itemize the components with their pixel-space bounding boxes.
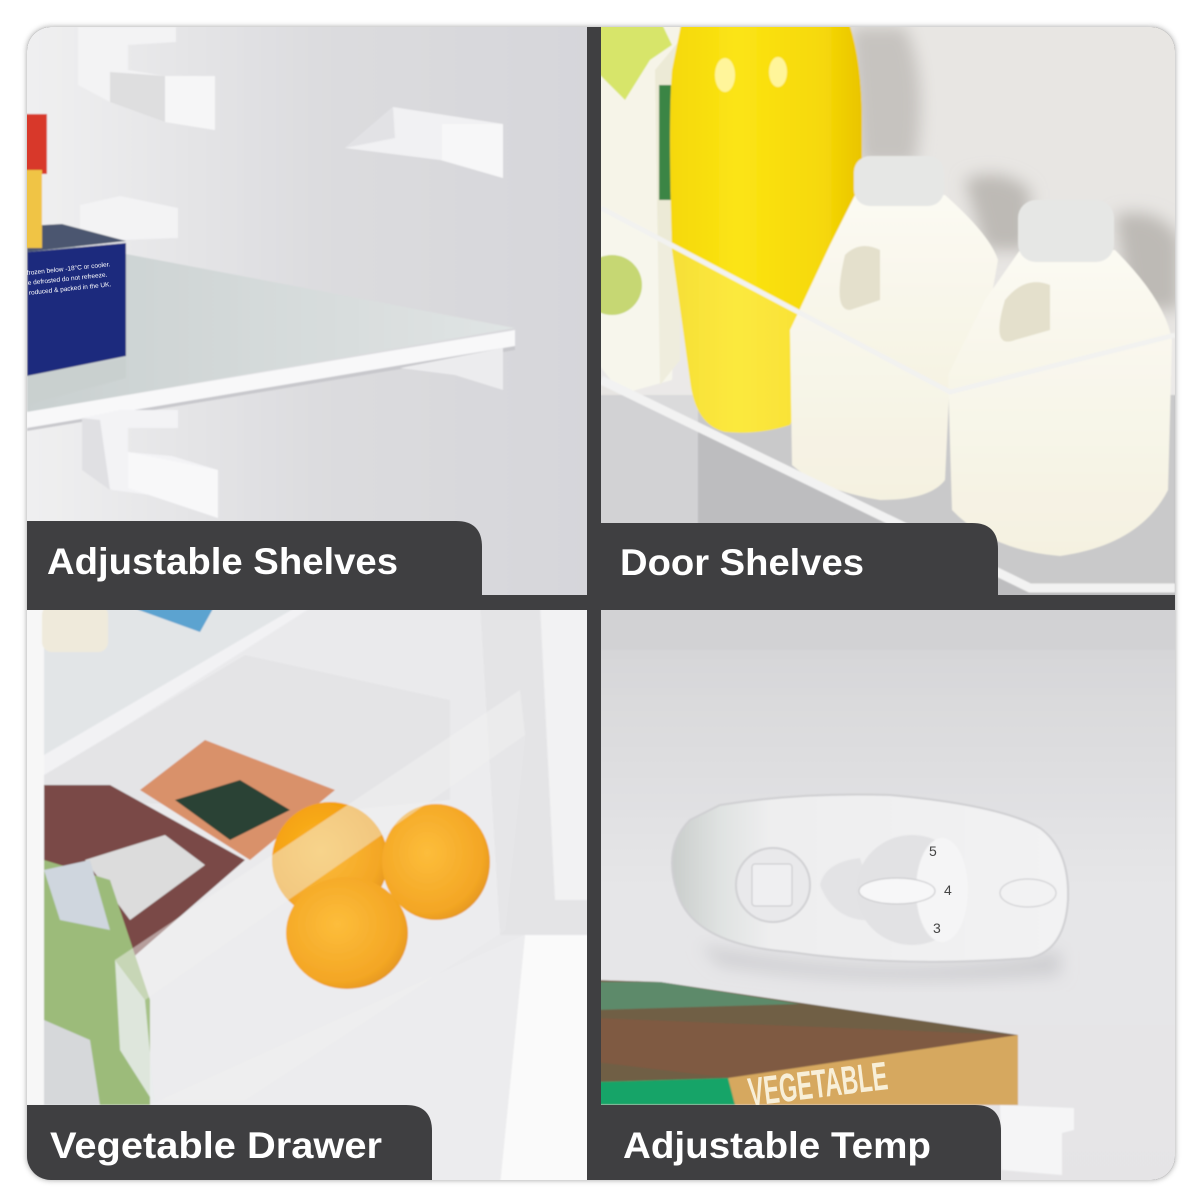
food box — [595, 980, 1018, 1105]
icon: upper left shelf supports — [102, 27, 215, 130]
milk bottle 2 — [948, 200, 1172, 556]
label: adjustable temp — [601, 1105, 1001, 1180]
box small print: roduced & packed in the UK. — [29, 281, 112, 297]
drawer back — [44, 748, 341, 805]
label: vegetable drawer — [27, 1105, 432, 1180]
milk bottle 1 — [790, 156, 998, 500]
box small print — [27, 262, 111, 295]
dial numbers: 5 — [929, 843, 937, 859]
juice carton — [601, 27, 680, 390]
panel: door shelves — [582, 20, 1180, 600]
dial numbers — [930, 846, 952, 933]
panel: vegetable drawer — [20, 605, 590, 1185]
box small print: frozen below -18°C or cooler. — [26, 260, 111, 277]
icon: right upper shelf support — [345, 107, 503, 178]
fridge side wall — [480, 605, 590, 935]
label: door shelves — [601, 523, 998, 595]
thermostat shadow — [700, 945, 1060, 981]
icon: lower left shelf supports — [82, 410, 218, 518]
box title: VEGETABLE — [746, 1054, 890, 1115]
panel: adjustable temp — [595, 605, 1180, 1185]
glass shelf — [27, 240, 515, 431]
vegetables — [44, 740, 335, 1105]
label: adjustable shelves — [27, 521, 482, 595]
yellow bottle — [670, 20, 862, 433]
label: adjustable temp: Adjustable Temp — [623, 1125, 931, 1166]
dial numbers: 3 — [933, 920, 941, 936]
icon: middle left shelf support — [100, 197, 178, 240]
label: vegetable drawer: Vegetable Drawer — [50, 1125, 382, 1166]
drawer front — [114, 804, 490, 1097]
wall shadows — [850, 27, 1180, 310]
door edge and base — [500, 935, 590, 1185]
label: adjustable shelves: Adjustable Shelves — [47, 541, 398, 582]
oranges — [272, 802, 490, 989]
label: door shelves: Door Shelves — [620, 542, 864, 583]
dial numbers: 4 — [944, 882, 952, 898]
shelf bracket — [1000, 1105, 1074, 1175]
upper glass shelf — [42, 610, 214, 652]
temperature dial — [820, 836, 936, 944]
food box — [27, 113, 127, 376]
door shelf bin — [601, 208, 1175, 590]
icon: shelf bracket right — [400, 348, 503, 390]
thermostat housing — [672, 794, 1068, 962]
box small print: e defrosted do not refreeze. — [28, 272, 108, 287]
panel: adjustable shelves — [20, 20, 590, 600]
